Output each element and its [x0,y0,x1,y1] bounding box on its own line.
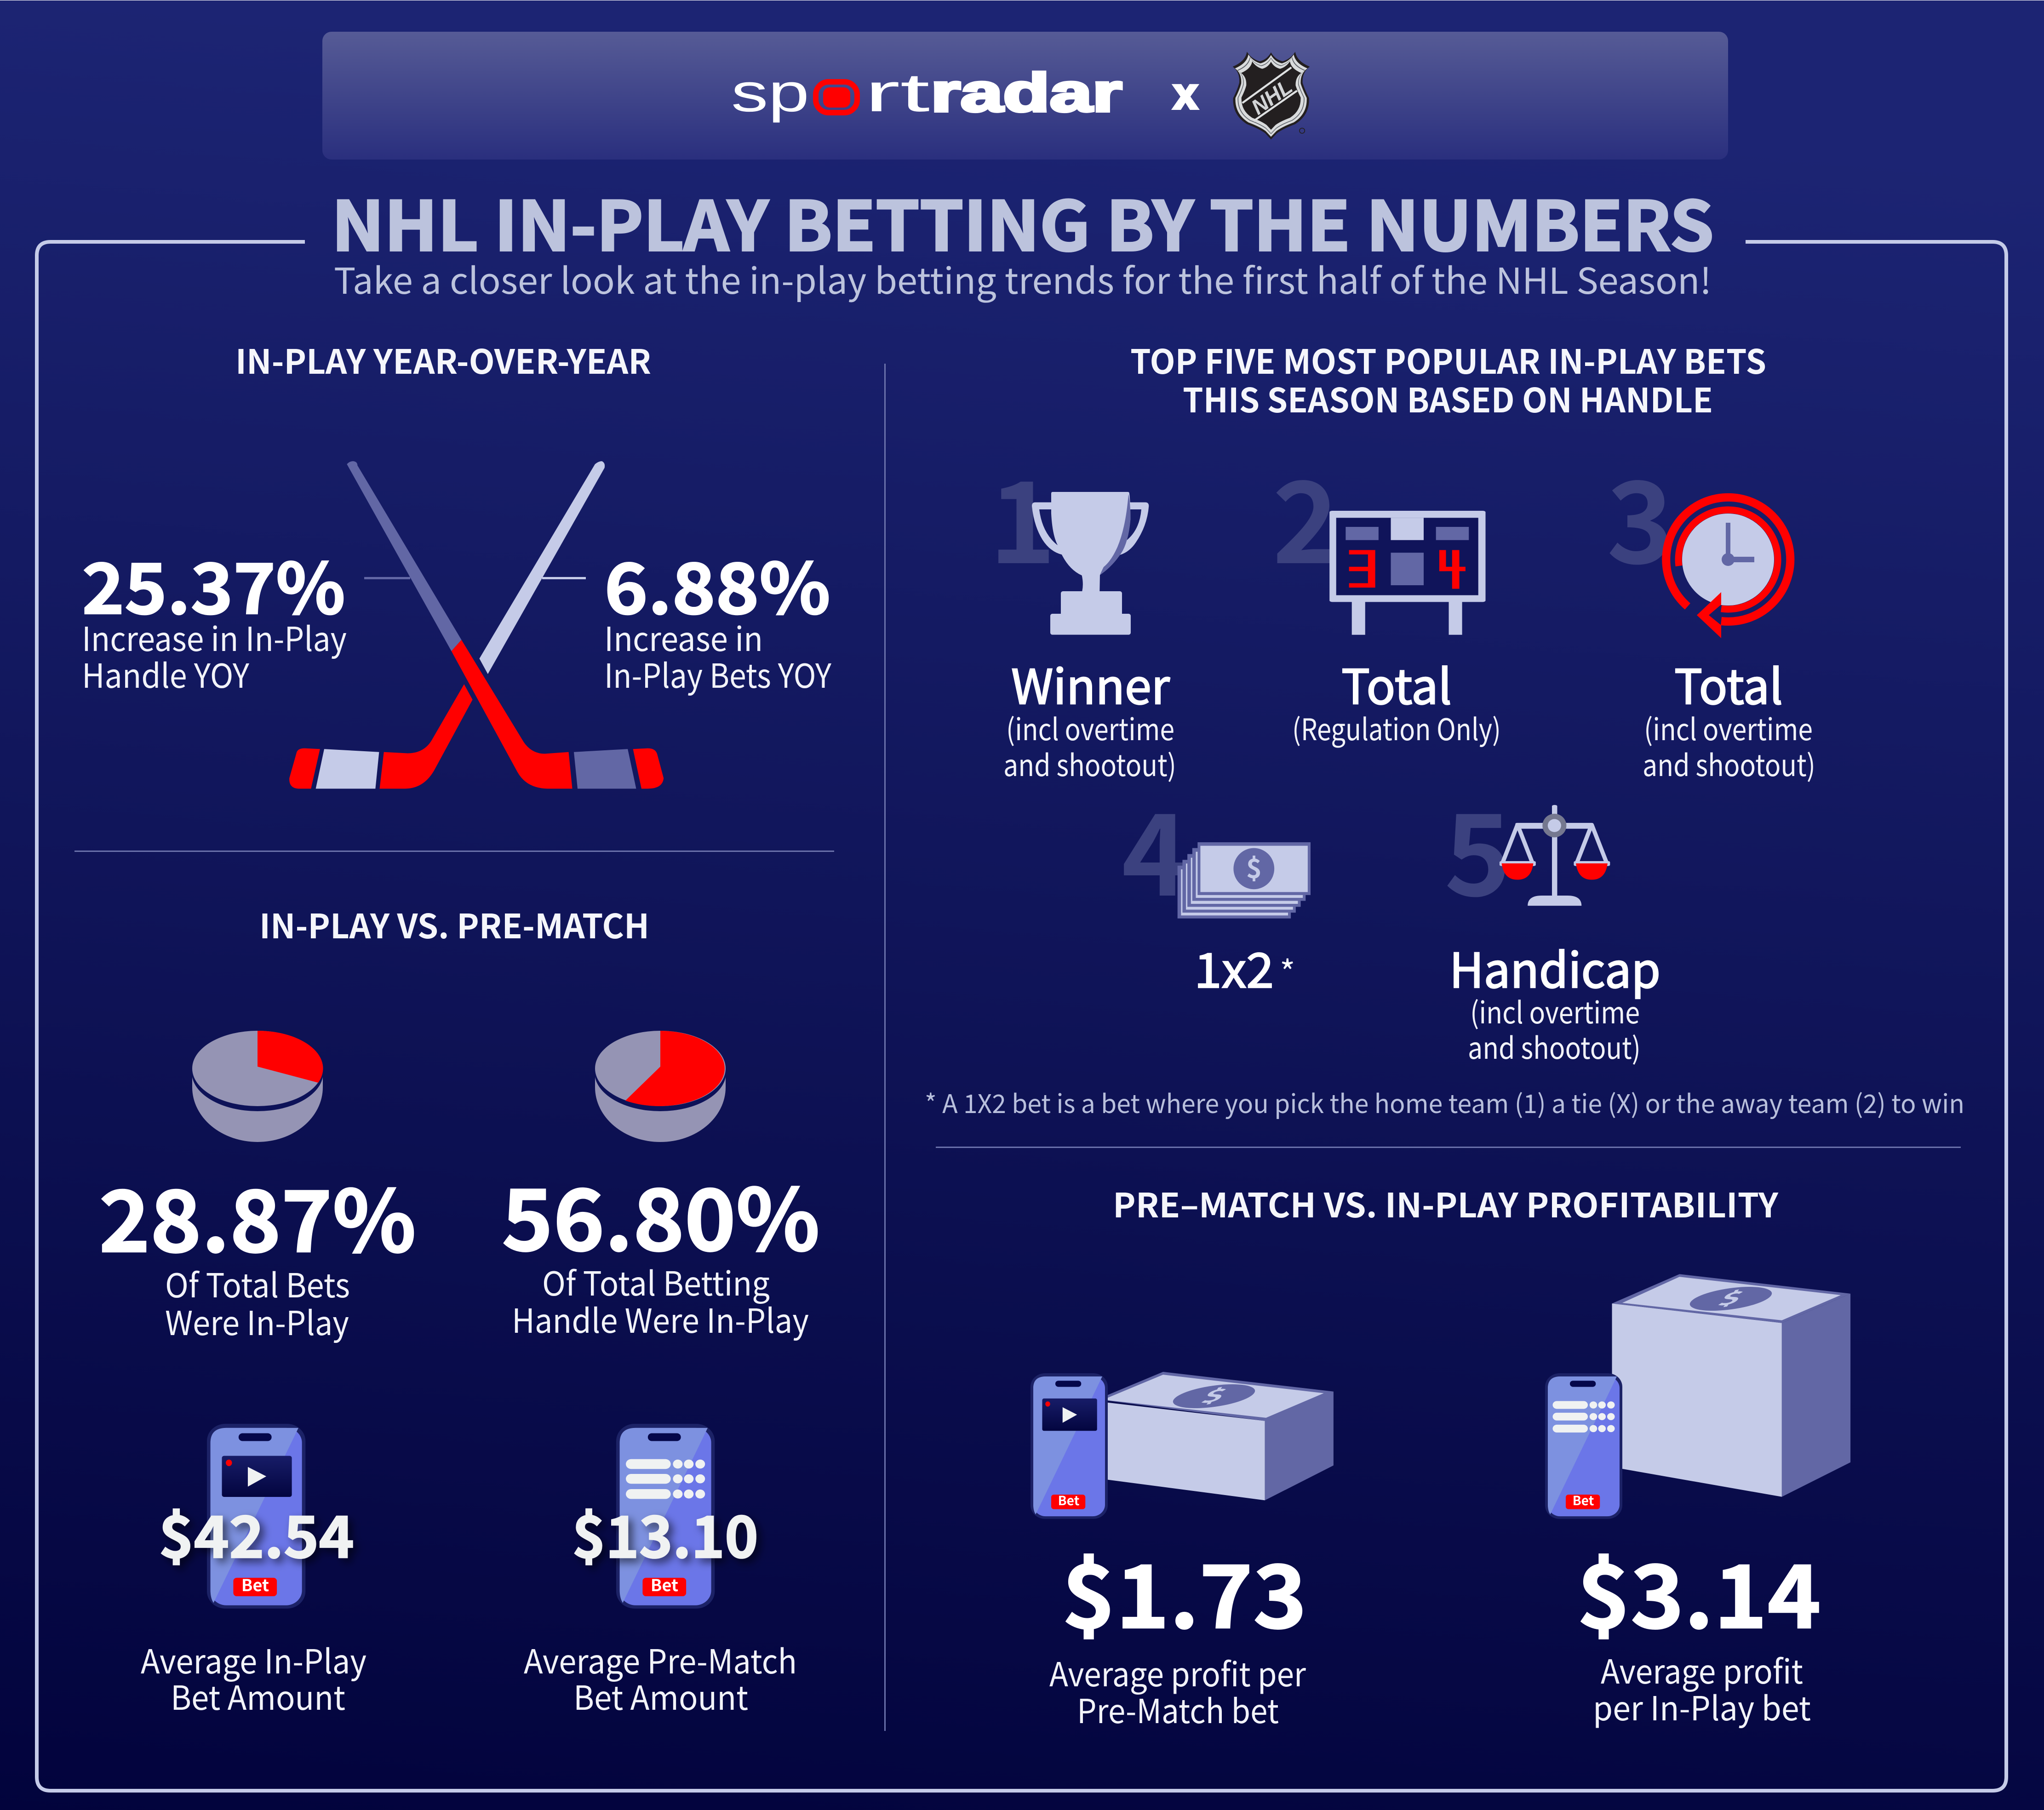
panel: top five in-play bets [925,335,1964,1121]
sportradar logo [731,63,1122,123]
label: average pre-match bet amount [524,1635,797,1719]
chart: puck pie 28.87% [191,1031,324,1142]
icon: NHL shield: NHL [1247,74,1297,119]
rank 4: 1x2: * [1280,946,1295,994]
sportradar logo: radar [931,63,1122,123]
stat: 6.88% [604,533,832,697]
rank 3: total incl overtime: and shootout) [1643,742,1815,785]
label: average pre-match bet amount: Average Pre-Match [524,1635,797,1683]
panel: profitability [1031,1179,1850,1733]
icon: stack of bills [1178,842,1311,919]
panel: in-play vs pre-match [99,900,820,1719]
stat: $1.73 [1049,1527,1307,1733]
icon: balance scale [1500,805,1610,906]
rank 3: total incl overtime [1607,432,1815,785]
heading: IN-PLAY VS. PRE-MATCH [259,900,649,948]
label: average in-play bet amount [141,1635,366,1719]
rank 1: winner: (incl overtime [1006,706,1174,749]
label: average pre-match bet amount: Bet Amount [573,1671,748,1719]
header banner [322,32,1728,160]
icon: trophy [1032,492,1149,635]
stat: $3.14: Average profit [1601,1645,1803,1693]
rank 5: handicap: and shootout) [1468,1024,1641,1068]
icon: tall money stack: $ [1712,1282,1752,1312]
rank 2: total regulation: 2 [1272,432,1339,596]
icon: scoreboard [1329,511,1486,635]
icon: tall money stack [1612,1274,1850,1497]
icon: phone with odds small [1545,1373,1622,1519]
stat: 28.87%: Were In-Play [165,1296,349,1345]
stat: $3.14: per In-Play bet [1593,1682,1811,1730]
icon: phone with video: Bet [241,1572,269,1596]
stat: 28.87%: 28.87% [99,1153,416,1277]
icon: phone with video small [1031,1373,1108,1519]
icon: phone with odds small: Bet [1573,1491,1594,1509]
rank 5: handicap: Handicap [1449,932,1660,1001]
rank 5: handicap [1444,765,1660,1068]
rank 1: winner: Winner [1011,648,1170,718]
stat: 6.88%: Increase in [604,612,763,661]
rank 2: total regulation: (Regulation Only) [1292,706,1501,749]
stat: $1.73: Pre-Match bet [1077,1684,1279,1733]
rank 4: 1x2: 4 [1122,765,1188,928]
stat: 25.37%: 25.37% [82,533,345,634]
stat: $3.14: $3.14 [1577,1527,1821,1653]
stat: 56.80%: 56.80% [502,1152,820,1275]
stat: 25.37% [82,533,347,697]
panel: in-play year-over-year [82,335,832,788]
stat: 25.37%: Increase in In-Play [82,612,347,661]
title: NHL IN-PLAY BETTING BY THE NUMBERS [332,171,1714,270]
icon: phone with video [207,1424,305,1609]
stat: 56.80%: Of Total Betting [542,1257,770,1305]
stat: 56.80% [502,1152,820,1342]
heading: TOP FIVE MOST POPULAR IN-PLAY BETS [1130,335,1766,384]
icon: phone with odds [616,1424,715,1609]
times sign: x [1174,69,1197,118]
rank 3: total incl overtime: 3 [1607,432,1673,596]
rank 4: 1x2: $ [1246,847,1262,886]
sportradar logo: sp [731,63,809,123]
rank 2: total regulation: Total [1341,648,1452,718]
icon: short money stack: $ [1195,1380,1236,1409]
icon: crossed hockey sticks [289,461,664,788]
stat: 6.88%: 6.88% [604,533,830,634]
icon: phone with odds: Bet [651,1572,678,1596]
rank 3: total incl overtime: Total [1674,648,1783,718]
rank 1: winner [989,432,1176,785]
icon: phone with video small: Bet [1058,1491,1080,1509]
stat: $3.14 [1577,1527,1821,1730]
stat: 28.87% [99,1153,416,1345]
stat: 28.87%: Of Total Bets [165,1259,350,1307]
footnote: * A 1X2 bet is a bet where you pick the home team (1) a tie (X) or the away team (2) to win [925,1084,1964,1121]
chart: puck pie 56.80% [595,1031,726,1142]
stat: 56.80%: Handle Were In-Play [512,1294,809,1342]
rank 2: total regulation [1272,432,1501,749]
label: average in-play bet amount: Average In-Play [141,1635,366,1683]
stat: $13.10: $13.10 [572,1491,758,1574]
stat: 6.88%: In-Play Bets YOY [604,649,832,697]
heading [1130,335,1766,423]
rank 1: winner: and shootout) [1003,742,1176,785]
sportradar logo: rt [865,63,930,123]
rank 5: handicap: (incl overtime [1470,989,1640,1032]
icon: short money stack [1097,1372,1334,1500]
rank 5: handicap: 5 [1444,765,1511,928]
heading: THIS SEASON BASED ON HANDLE [1183,374,1713,423]
stat: 25.37%: Handle YOY [82,649,250,697]
icon: NHL shield [1233,52,1310,139]
subtitle: Take a closer look at the in-play betting trends for the first half of the NHL Season! [334,253,1712,304]
stat: $1.73: Average profit per [1049,1648,1306,1696]
heading: PRE–MATCH VS. IN-PLAY PROFITABILITY [1113,1179,1779,1228]
rank 1: winner: 1 [989,432,1056,596]
rank 4: 1x2 [1122,765,1311,1001]
rank 4: 1x2: 1x2 [1194,932,1274,1001]
label: average in-play bet amount: Bet Amount [171,1671,345,1719]
heading: IN-PLAY YEAR-OVER-YEAR [235,335,651,384]
stat: $42.54: $42.54 [159,1491,354,1574]
stat: $1.73: $1.73 [1062,1527,1307,1653]
rank 3: total incl overtime: (incl overtime [1644,706,1813,749]
icon: clock with reverse arrow [1666,497,1790,638]
